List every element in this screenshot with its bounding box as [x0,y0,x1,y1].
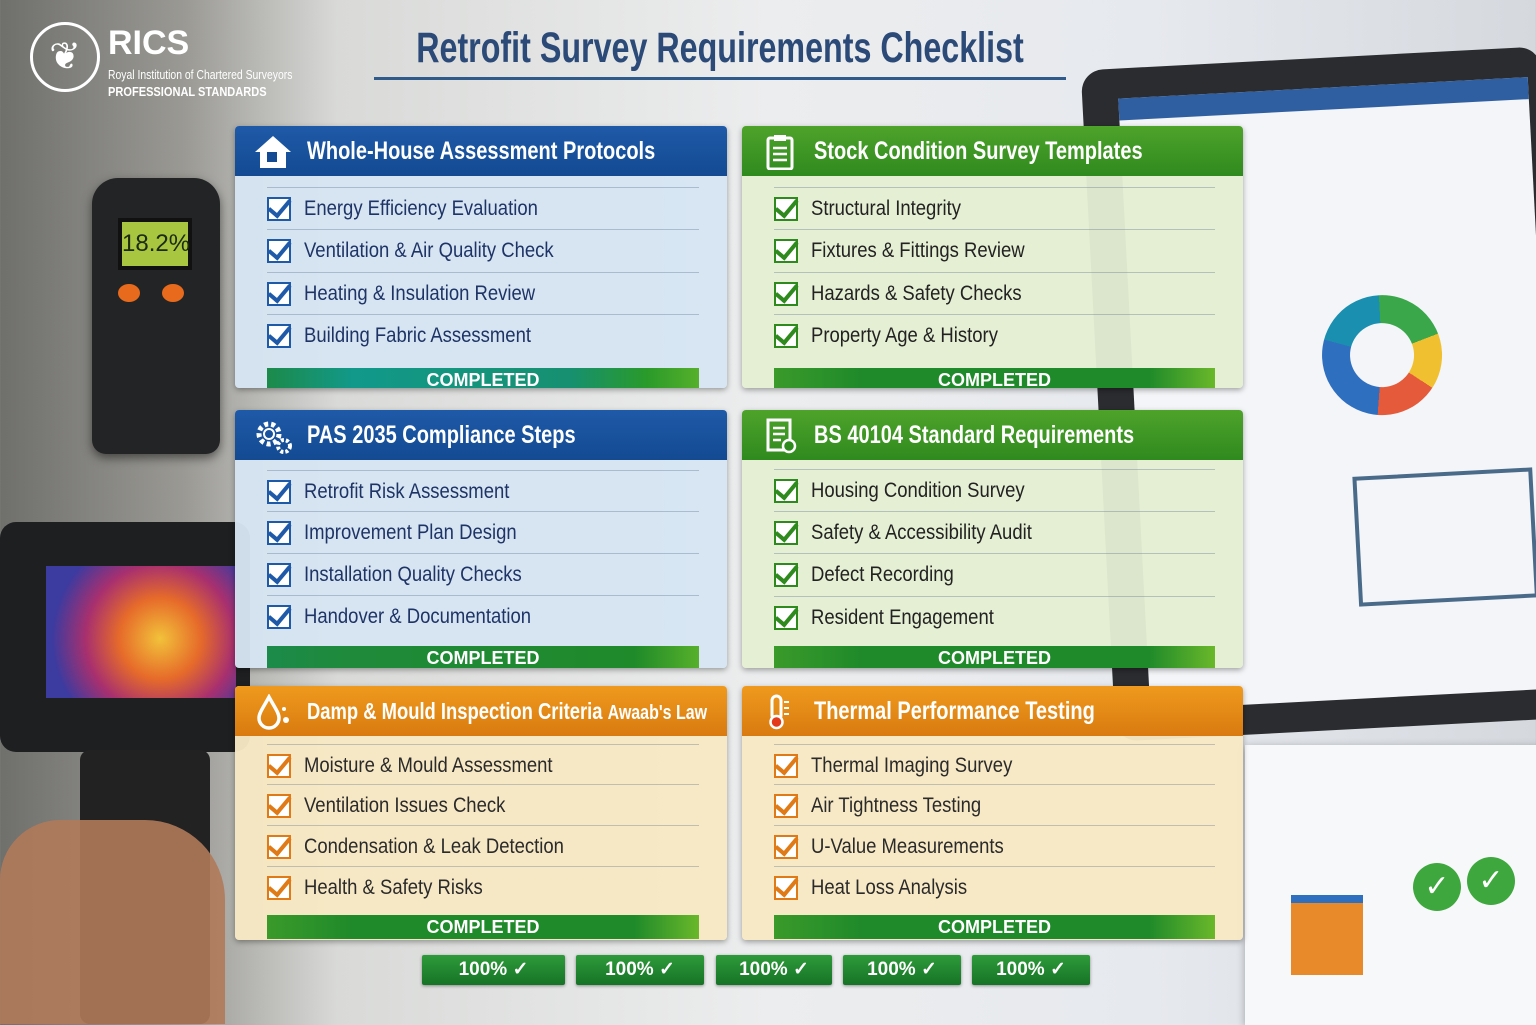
panel: BS 40104 Standard Requirements: Housing Condition Survey [811,478,1025,502]
left device background: moisture meter: 18.2% [122,230,190,257]
title: Retrofit Survey Requirements Checklist [416,24,1024,72]
icon: thermometer [769,694,789,730]
panel: BS 40104 Standard Requirements: Defect Recording [811,562,954,586]
progress badges: 100%: 100% ✓ [605,959,675,980]
icon: house [255,136,291,168]
panel: BS 40104 Standard Requirements: BS 40104 Standard Requirements [814,420,1134,448]
icon: RICS emblem [30,22,100,92]
progress badges: 100%: 100% ✓ [867,959,937,980]
left device background: moisture meter [92,178,220,454]
right device background: tablet [1081,46,1536,742]
heading [235,126,727,176]
logo: RICS: PROFESSIONAL STANDARDS [108,84,267,99]
panel: Whole-House Assessment Protocols [235,126,727,388]
progress badges: 100%: 100% ✓ [996,959,1066,980]
panel: Damp & Mould Inspection Criteria: Condensation & Leak Detection [304,834,564,858]
icon: RICS emblem: ❦ [49,36,81,78]
panel: Stock Condition Survey Templates: Fixtures & Fittings Review [811,238,1025,262]
completed bar: COMPLETED [426,917,540,937]
completed bar [267,915,699,939]
icon: clipboard [766,135,794,170]
heading: Whole-House Assessment Protocols [307,136,655,164]
panel: PAS 2035 Compliance Steps: Installation Quality Checks [304,562,522,586]
panel: BS 40104 Standard Requirements: Resident Engagement [811,606,994,628]
completed bar [774,915,1215,939]
panel: Whole-House Assessment Protocols: Energy Efficiency Evaluation [304,196,538,220]
panel: Damp & Mould Inspection Criteria: Moisture & Mould Assessment [304,754,553,776]
panel: Damp & Mould Inspection Criteria: Ventilation Issues Check [304,794,505,816]
progress badges: 100%: 100% ✓ [459,959,528,980]
panel: PAS 2035 Compliance Steps: Improvement Plan Design [304,520,517,544]
panel: Damp & Mould Inspection Criteria [235,686,727,940]
panel: Stock Condition Survey Templates: Hazards & Safety Checks [811,282,1022,304]
logo: RICS: RICS [108,24,189,62]
completed bar [774,646,1215,670]
completed bar [267,368,699,392]
completed bar: COMPLETED [426,648,540,668]
panel: Whole-House Assessment Protocols: Building Fabric Assessment [304,324,531,346]
left device background: thermal camera [0,522,250,752]
completed bar [267,646,699,670]
panel: Thermal Performance Testing [742,686,1243,940]
panel: Whole-House Assessment Protocols: Ventilation & Air Quality Check [304,238,554,262]
panel: Whole-House Assessment Protocols: Heating & Insulation Review [304,282,535,304]
panel: Thermal Performance Testing: Thermal Performance Testing [814,696,1095,724]
completed bar [774,368,1215,392]
panel: PAS 2035 Compliance Steps [235,410,727,668]
panel: Stock Condition Survey Templates: Structural Integrity [811,196,961,220]
panel: PAS 2035 Compliance Steps: PAS 2035 Compliance Steps [307,420,576,448]
panel: Damp & Mould Inspection Criteria: Health & Safety Risks [304,876,483,898]
panel: Thermal Performance Testing: Thermal Imaging Survey [811,754,1012,776]
progress badges: 100%: 100% ✓ [739,959,809,980]
panel: BS 40104 Standard Requirements: Safety & Accessibility Audit [811,520,1032,544]
panel: Thermal Performance Testing: U-Value Measurements [811,834,1004,858]
icon: document [766,418,796,454]
progress badges: 100% [420,954,1092,988]
panel: PAS 2035 Compliance Steps: Retrofit Risk Assessment [304,480,509,502]
right device background: report sheet: ✓ [1424,870,1450,903]
panel: BS 40104 Standard Requirements [742,410,1243,668]
panel: Stock Condition Survey Templates: Property Age & History [811,324,998,346]
panel: Damp & Mould Inspection Criteria: Damp & Mould Inspection Criteria Awaab's Law [307,698,707,724]
logo: RICS: Royal Institution of Chartered Surveyors [108,67,292,82]
panel: PAS 2035 Compliance Steps: Handover & Documentation [304,604,531,628]
panel: Thermal Performance Testing: Air Tightness Testing [811,794,981,816]
panel: Stock Condition Survey Templates: Stock Condition Survey Templates [814,136,1143,164]
completed bar: COMPLETED [938,917,1051,937]
panel: Stock Condition Survey Templates [742,126,1243,388]
right device background: report sheet [1245,745,1536,1025]
icon: gears [256,422,292,454]
panel: Thermal Performance Testing: Heat Loss Analysis [811,876,967,898]
logo: RICS [30,22,292,99]
completed bar: COMPLETED [938,648,1051,668]
right device background: report sheet: ✓ [1478,864,1504,897]
icon: water drop [257,694,289,730]
